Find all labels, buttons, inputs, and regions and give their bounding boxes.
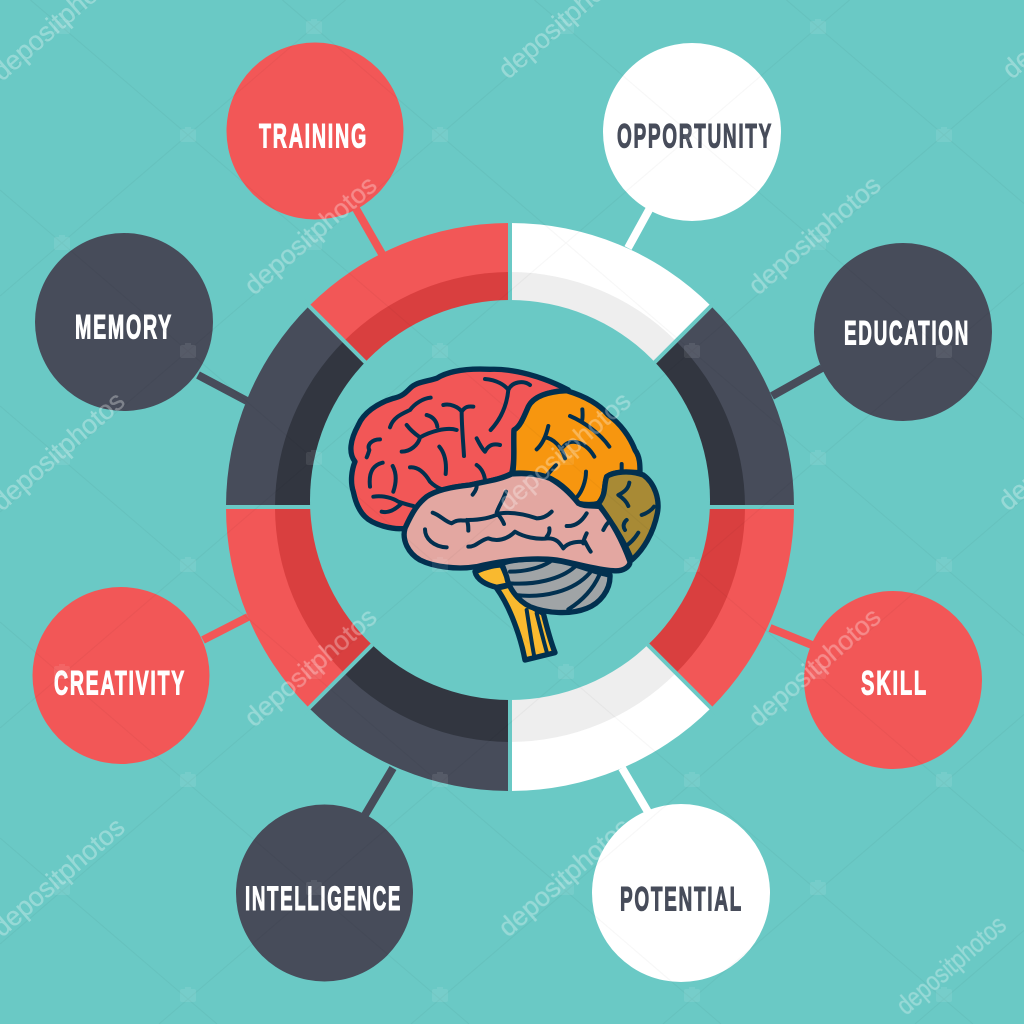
circle: skill [804,591,982,769]
segment: right upper dark [510,306,794,507]
circle: opportunity: OPPORTUNITY [617,118,773,156]
segment: bottom left dark [309,507,510,791]
frontal lobe [351,369,568,529]
circle: intelligence: INTELLIGENCE [245,880,402,918]
watermark text: depositphotos [492,812,636,943]
circle: memory [35,233,213,411]
watermark text: depositphotos [742,170,886,301]
segment: bottom right white [510,507,711,791]
circle: memory: MEMORY [75,308,173,346]
occipital lobe [598,472,658,560]
temporal lobe [404,474,630,571]
circle: education [814,243,992,421]
watermark text: depositphotos [238,602,382,733]
circle: training: TRAINING [259,118,368,156]
segmented ring [218,215,802,800]
cerebellum [502,559,610,613]
icon: brain [351,369,658,660]
circle: potential: POTENTIAL [620,880,743,918]
circle: opportunity [603,43,781,221]
segment: right lower red [510,507,794,708]
segment: left lower red [226,507,510,708]
watermark text: depositphotos [238,170,382,301]
circle: potential [592,804,770,982]
circle: creativity [32,587,210,764]
circle: skill: SKILL [861,664,928,702]
segment: top right white [510,223,711,507]
segment: top left red [309,223,510,507]
segment: left upper dark [226,306,510,507]
watermark text: depositphotos [742,602,886,733]
watermark text: depositphotos [492,386,636,517]
circle: training [226,42,404,220]
circle: creativity: CREATIVITY [54,664,186,702]
circle: intelligence [236,804,413,982]
parietal lobe [513,391,640,505]
connector lines [198,200,822,815]
brain stem [475,565,555,660]
